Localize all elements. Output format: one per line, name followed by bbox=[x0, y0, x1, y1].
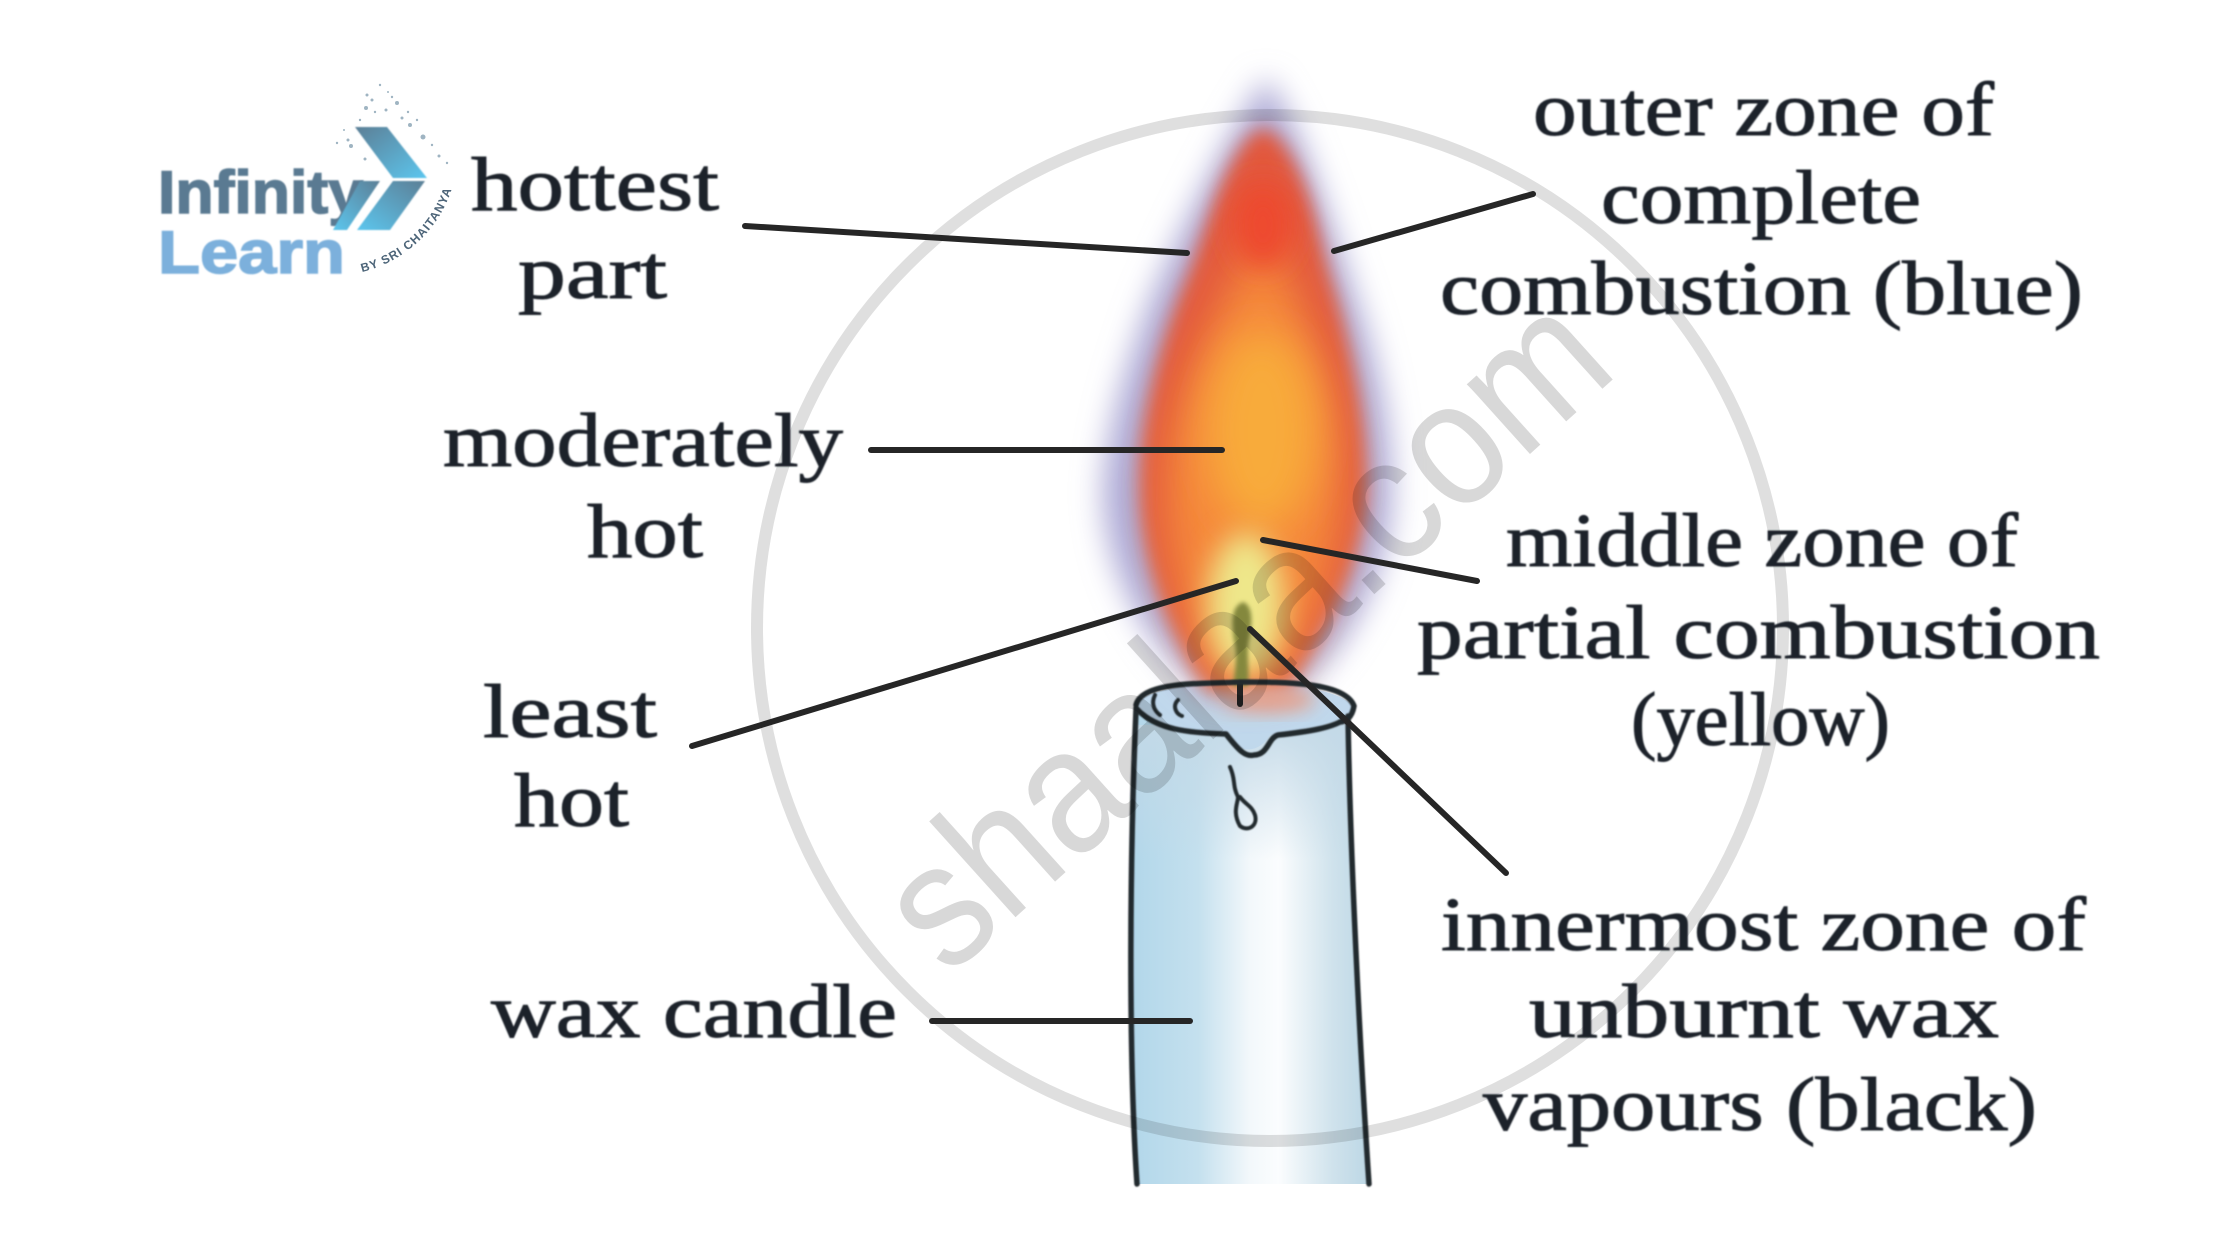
line: least hot bbox=[692, 581, 1236, 746]
line: innermost zone bbox=[1250, 629, 1506, 873]
line: wax candle bbox=[932, 1018, 1190, 1024]
line: middle zone bbox=[1263, 540, 1477, 581]
label: middle zone: (yellow) bbox=[1631, 678, 1890, 762]
hottest red spot bbox=[1233, 181, 1293, 269]
label: moderately hot: hot bbox=[587, 490, 703, 574]
orange zone bbox=[1165, 215, 1342, 685]
label: innermost zone: vapours (black) bbox=[1483, 1063, 2037, 1147]
line: outer zone bbox=[1334, 194, 1533, 251]
label: outer zone bbox=[1440, 68, 2083, 331]
label: outer zone: combustion (blue) bbox=[1440, 247, 2083, 331]
red edge zone bbox=[1140, 128, 1366, 690]
label: innermost zone: innermost zone of bbox=[1441, 883, 2087, 967]
candle upper shading bbox=[1131, 725, 1354, 860]
label: innermost zone: unburnt wax bbox=[1529, 970, 1999, 1054]
outer blue zone bbox=[1103, 78, 1392, 698]
watermark circle bbox=[757, 115, 1783, 1141]
line: hottest part bbox=[745, 226, 1187, 253]
label: middle zone: partial combustion bbox=[1417, 591, 2100, 675]
leader lines bbox=[692, 194, 1533, 1021]
label: outer zone: outer zone of bbox=[1533, 68, 1995, 152]
wick base bbox=[1237, 684, 1243, 704]
label: hottest part: hottest bbox=[471, 143, 719, 227]
label: hottest part bbox=[471, 143, 719, 315]
label: hottest part: part bbox=[518, 231, 667, 315]
candle top surface bbox=[1136, 683, 1353, 749]
label: moderately hot bbox=[443, 399, 843, 574]
candle body bbox=[1131, 712, 1369, 1184]
label: middle zone bbox=[1417, 499, 2100, 762]
logo particles bbox=[336, 84, 448, 164]
candle outlines bbox=[1131, 682, 1369, 1184]
label: moderately hot: moderately bbox=[443, 399, 843, 483]
label: middle zone: middle zone of bbox=[1506, 499, 2019, 583]
watermark text: shaalaa.com bbox=[840, 253, 1646, 1006]
logo word Learn: Learn bbox=[158, 219, 345, 286]
label: least hot: hot bbox=[514, 759, 629, 843]
flame bbox=[1103, 78, 1392, 712]
pink base glow bbox=[1225, 688, 1315, 712]
labels bbox=[443, 68, 2100, 1147]
logo: Infinity Learn bbox=[158, 84, 452, 286]
logo tagline: BY SRI CHAITANYA bbox=[360, 190, 452, 272]
candle bbox=[1103, 78, 1392, 1184]
label: innermost zone bbox=[1441, 883, 2087, 1147]
logo word Infinity: Infinity bbox=[158, 159, 364, 226]
wick bbox=[1233, 602, 1251, 686]
label: wax candle: wax candle bbox=[491, 970, 897, 1054]
label: least hot: least bbox=[483, 670, 657, 754]
label: outer zone: complete bbox=[1601, 156, 1921, 240]
label: least hot bbox=[483, 670, 657, 843]
yellow zone bbox=[1208, 533, 1284, 677]
line: moderately hot bbox=[871, 447, 1222, 453]
logo chevron bbox=[333, 127, 427, 230]
amber core bbox=[1207, 330, 1317, 530]
